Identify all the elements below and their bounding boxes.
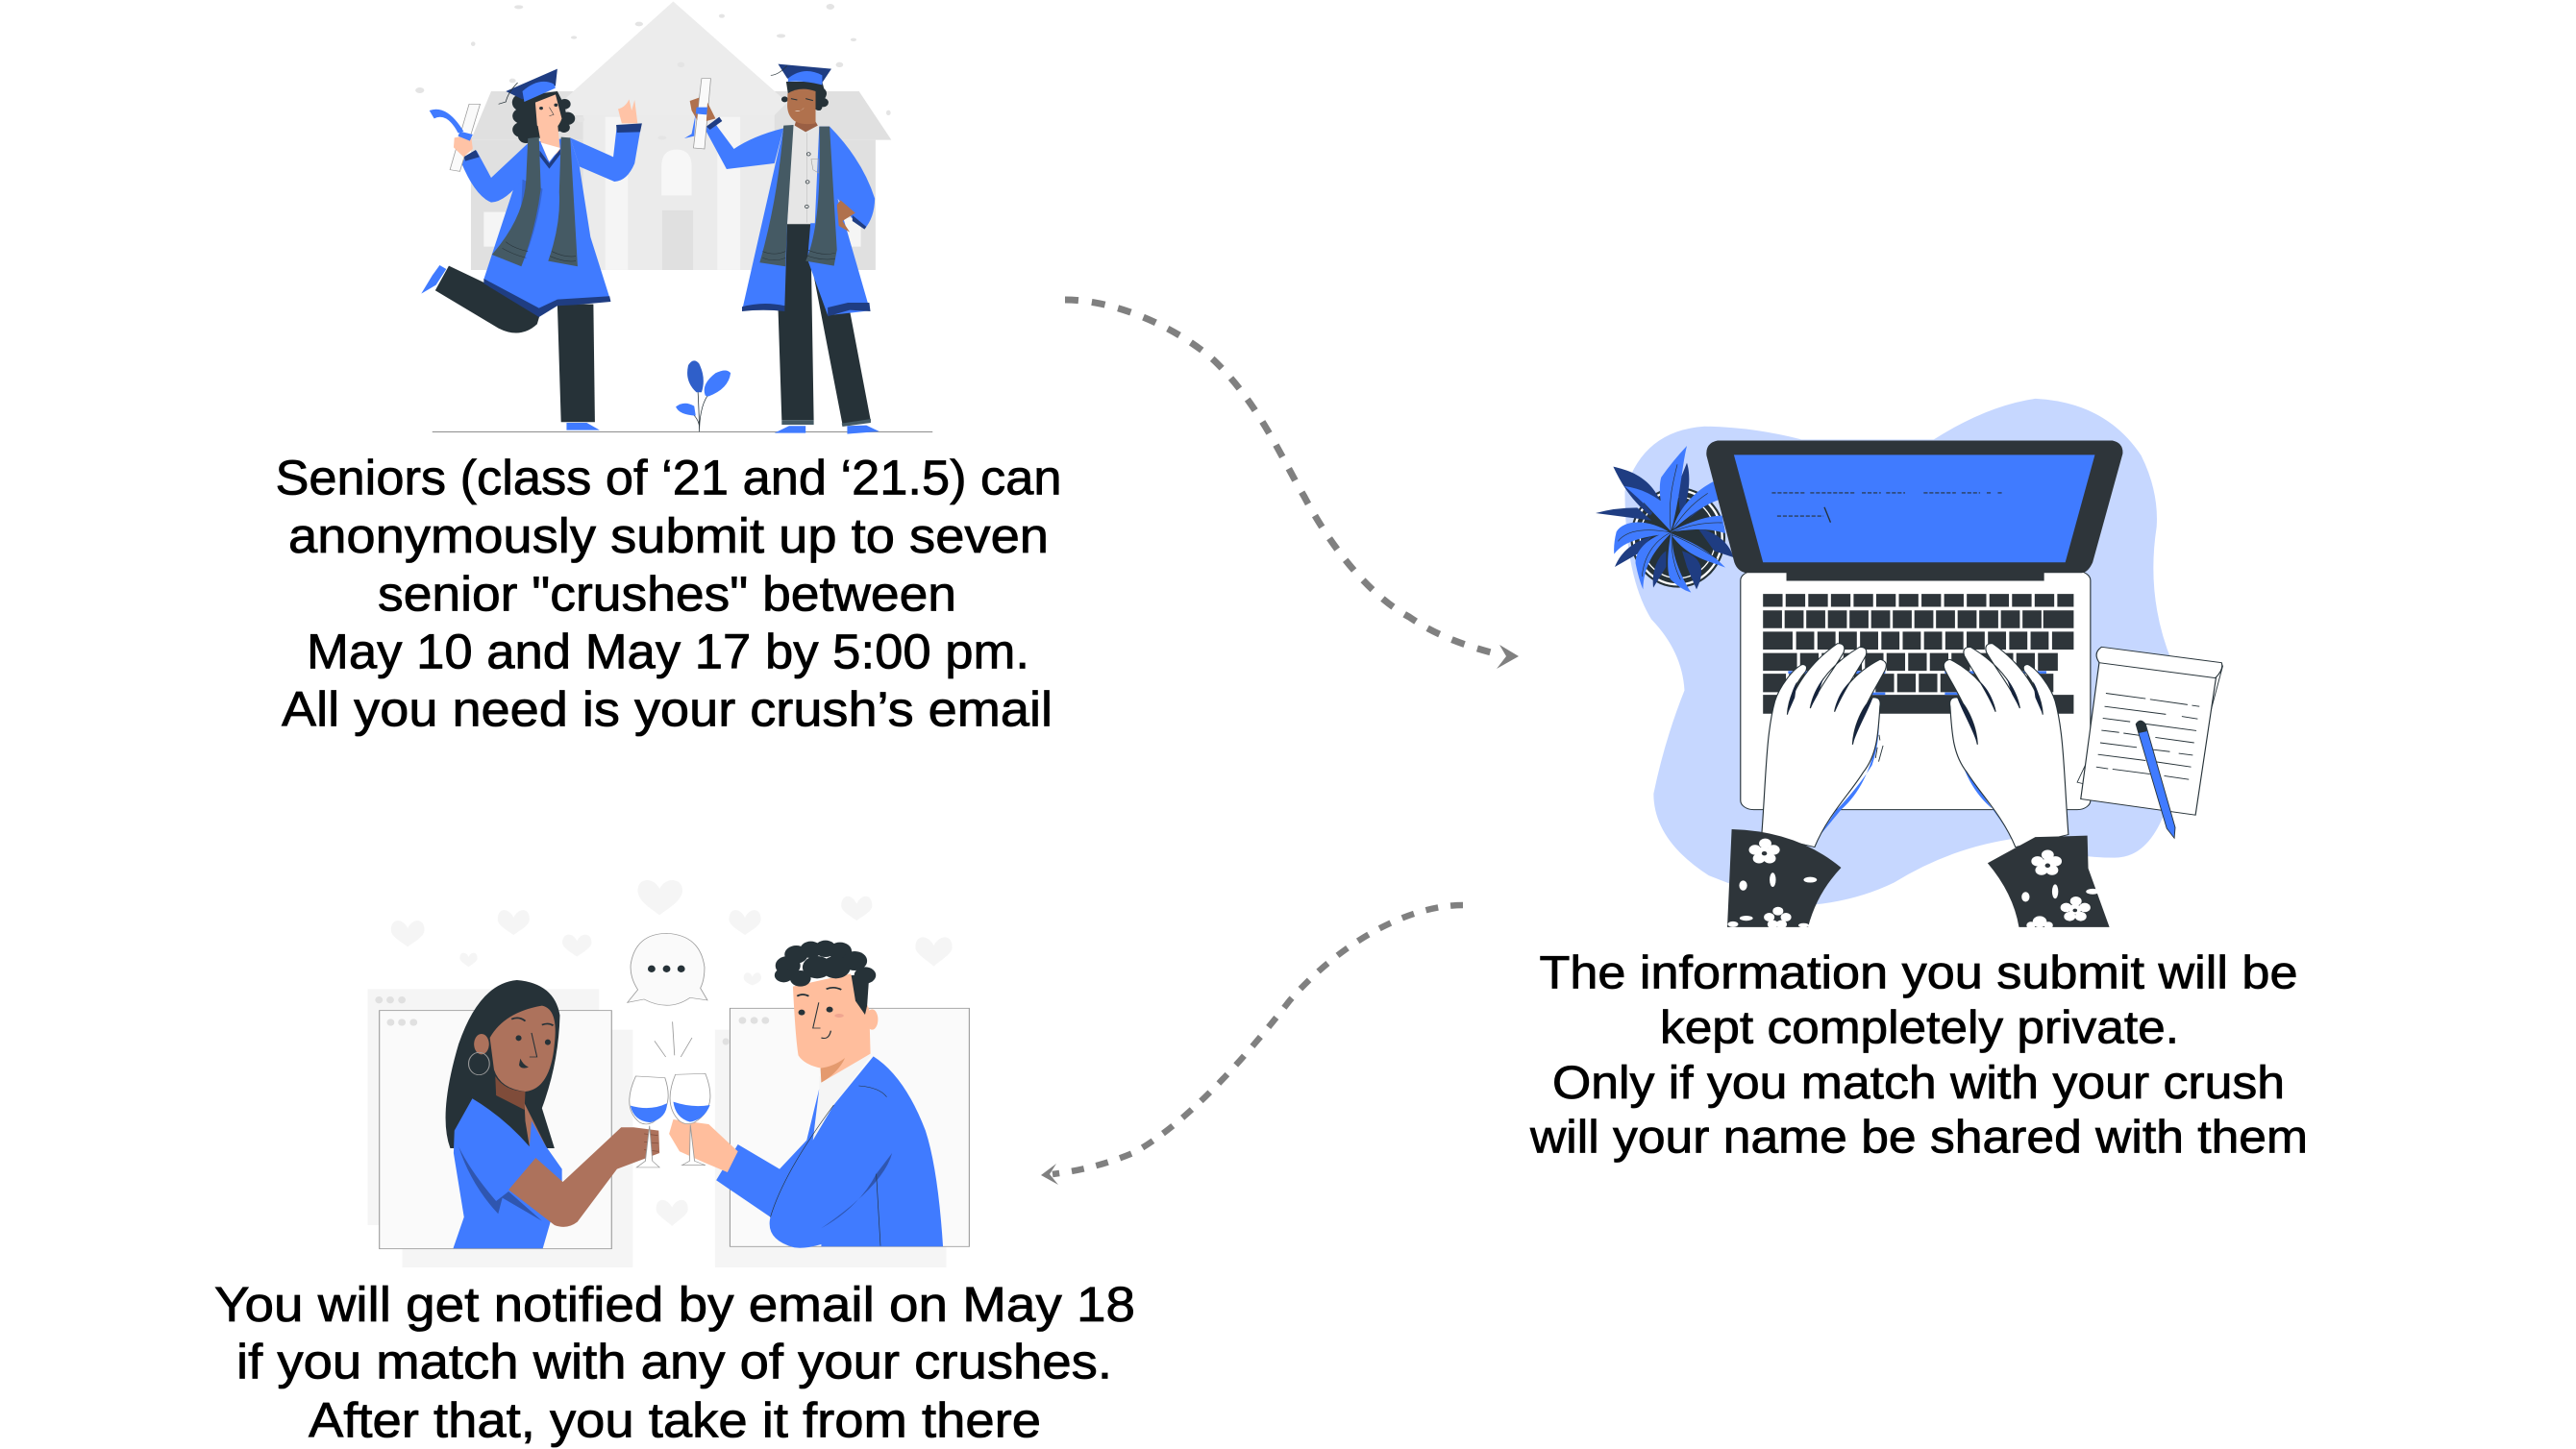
step 1 text: senior "crushes" between	[378, 567, 956, 621]
wine glasses	[630, 1076, 668, 1167]
step 2 text: will your name be shared with them	[1529, 1111, 2308, 1163]
back windows	[368, 989, 969, 1267]
speech bubble	[628, 933, 707, 1057]
right hand	[1944, 644, 2068, 847]
hand shadows	[1820, 706, 2009, 836]
man	[669, 941, 943, 1248]
hearts	[391, 880, 953, 1226]
step 3 text	[214, 1277, 1135, 1447]
step 2 text: Only if you match with your crush	[1552, 1057, 2285, 1109]
left hand	[1762, 644, 1886, 847]
step 2 text: kept completely private.	[1660, 1001, 2179, 1053]
step 1 text: All you need is your crush’s email	[282, 682, 1053, 736]
step 2 text	[1529, 947, 2308, 1163]
right graduate	[684, 64, 879, 434]
left graduate	[421, 69, 642, 430]
illustration: typing on laptop	[1596, 399, 2223, 929]
laptop lid and screen	[1706, 441, 2122, 580]
background blob	[1625, 399, 2182, 906]
right sleeve	[1988, 836, 2110, 929]
confetti	[415, 4, 891, 139]
left sleeve	[1727, 829, 1841, 928]
keyboard	[1763, 601, 2073, 704]
arrow: step 2 to step 3	[1041, 905, 1463, 1185]
left video window	[375, 996, 611, 1249]
illustration: toasting over video chat	[368, 880, 969, 1267]
step 2 text: The information you submit will be	[1540, 947, 2297, 999]
illustration: graduates in front of a building	[415, 2, 932, 434]
plant	[676, 360, 731, 431]
plant	[1596, 446, 1733, 593]
notepad	[2077, 647, 2223, 838]
arrow: step 1 to step 2	[1065, 300, 1519, 669]
step 3 text: if you match with any of your crushes.	[236, 1334, 1112, 1389]
step 1 text: Seniors (class of ‘21 and ‘21.5) can	[275, 450, 1061, 505]
step 1 text: May 10 and May 17 by 5:00 pm.	[307, 625, 1029, 678]
step 1 text	[275, 450, 1061, 736]
step 3 text: After that, you take it from there	[309, 1393, 1041, 1447]
step 1 text: anonymously submit up to seven	[288, 508, 1049, 563]
woman	[446, 980, 659, 1248]
building	[471, 2, 891, 270]
right video window	[723, 1008, 969, 1246]
ground line	[433, 430, 932, 433]
step 3 text: You will get notified by email on May 18	[214, 1277, 1135, 1332]
laptop base	[1741, 571, 2091, 810]
